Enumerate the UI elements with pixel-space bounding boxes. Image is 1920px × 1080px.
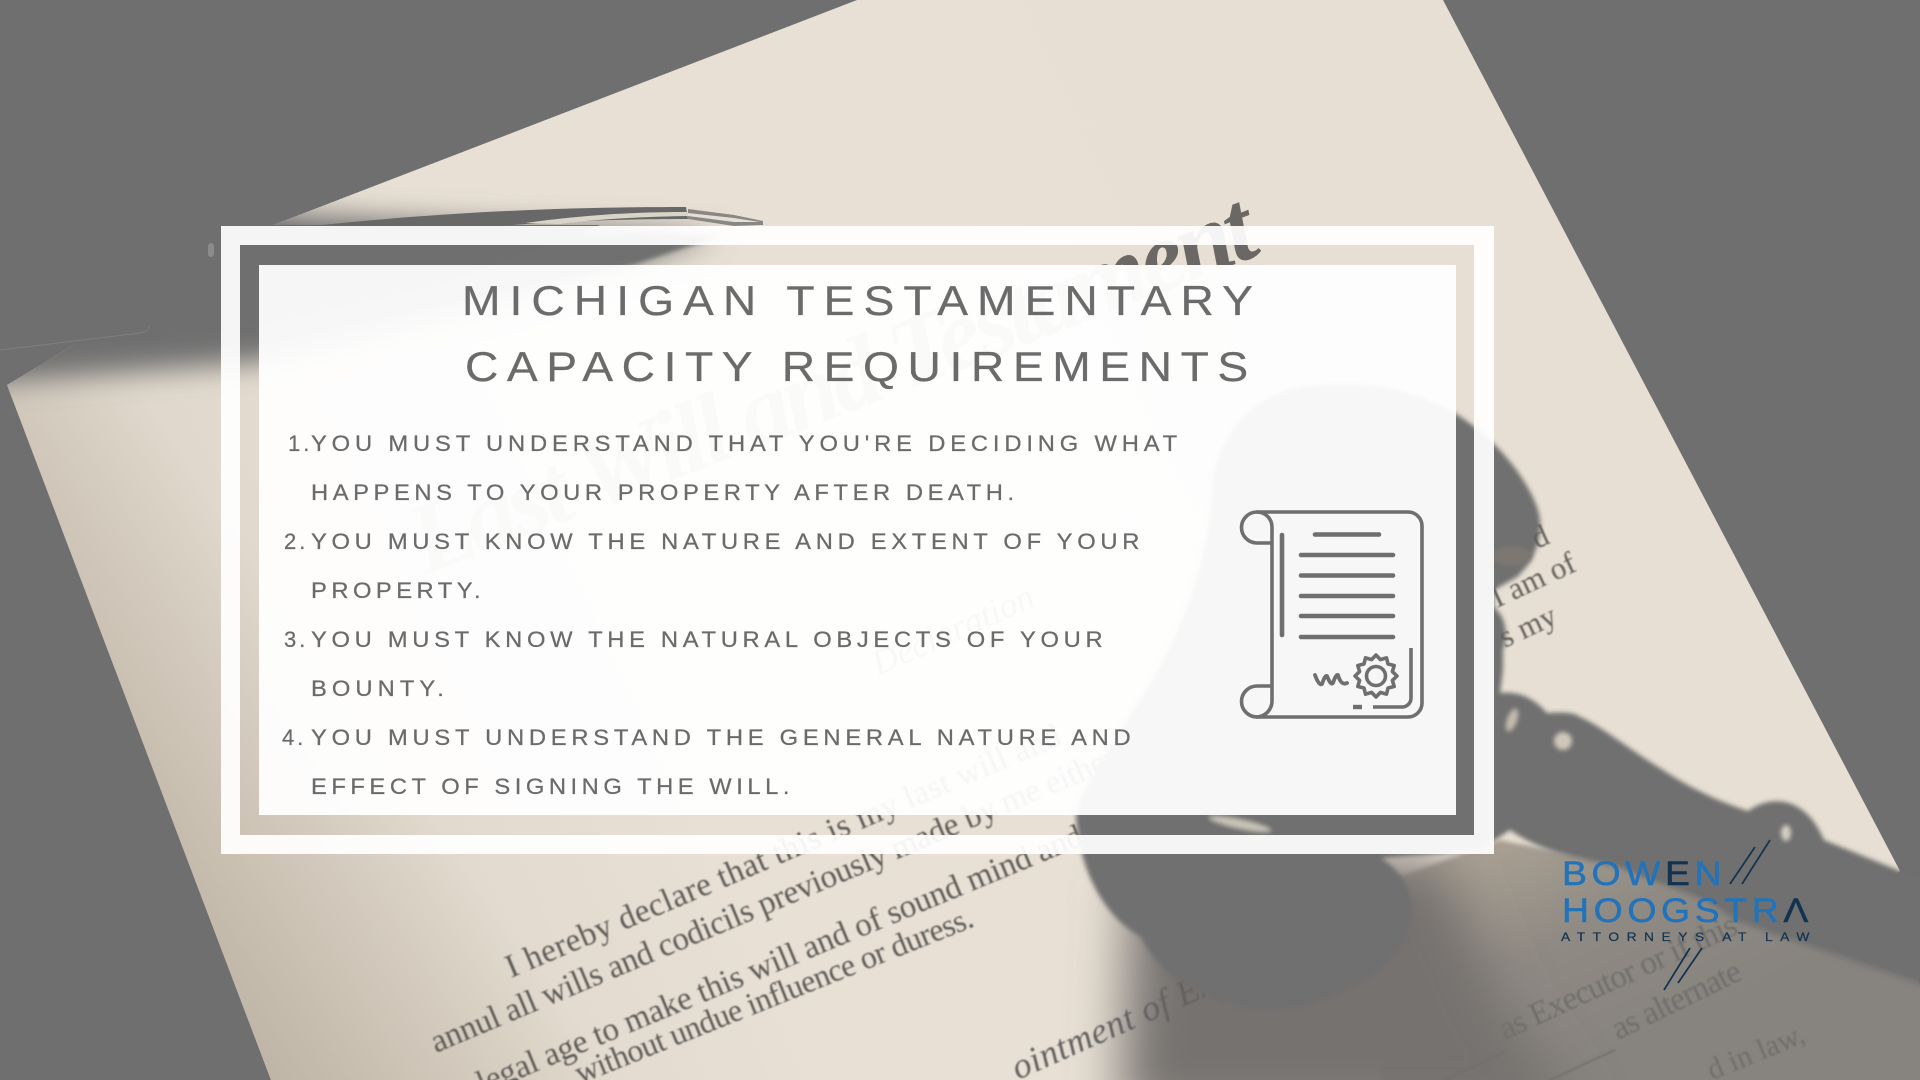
icon: scroll certificate <box>1242 512 1422 717</box>
photo: text beside gavel: d <box>1526 517 1554 555</box>
photo: faded text at lower right: as Executor or if this <box>1493 907 1743 1047</box>
item 3: BOUNTY. <box>311 676 444 701</box>
photo: declaration subheading: Declaration <box>864 576 1040 684</box>
item 4: EFFECT OF SIGNING THE WILL. <box>311 774 789 799</box>
logo: Bowen Hoogstra Attorneys at Law: BOWEN <box>1562 855 1722 893</box>
item 2 <box>284 529 1139 603</box>
title: MICHIGAN TESTAMENTARY <box>462 278 1253 325</box>
item 3: YOU MUST KNOW THE NATURAL OBJECTS OF YOUR <box>311 627 1103 652</box>
photo: pen <box>0 207 763 350</box>
photo: body text of the will: I hereby declare that this is my last will and <box>500 718 1067 985</box>
item 1: 1. <box>288 431 312 456</box>
item 4 <box>282 725 1131 799</box>
photo: text beside gavel: s my <box>1493 597 1562 654</box>
item 4: YOU MUST UNDERSTAND THE GENERAL NATURE AND <box>311 725 1131 750</box>
photo: faded text at lower right: as alternate <box>1606 953 1747 1047</box>
photo: pen shadow <box>7 198 716 400</box>
title <box>462 278 1253 391</box>
panel: requirements card <box>259 265 1456 815</box>
item 4: 4. <box>282 725 306 750</box>
item 3 <box>284 627 1103 701</box>
item 1: YOU MUST UNDERSTAND THAT YOU'RE DECIDING WHAT <box>311 431 1177 456</box>
item 1: HAPPENS TO YOUR PROPERTY AFTER DEATH. <box>311 480 1014 505</box>
item 3: 3. <box>284 627 308 652</box>
logo: Bowen Hoogstra Attorneys at Law <box>1561 840 1810 990</box>
item 2: YOU MUST KNOW THE NATURE AND EXTENT OF YOUR <box>311 529 1139 554</box>
photo: title letters above the card: Last Will and Testament <box>392 169 1273 596</box>
photo: gavel silhouette <box>1076 384 1920 1010</box>
item 1 <box>288 431 1177 505</box>
item 2: 2. <box>284 529 308 554</box>
item 2: PROPERTY. <box>311 578 481 603</box>
logo: Bowen Hoogstra Attorneys at Law: ATTORNEYS AT LAW <box>1561 930 1810 944</box>
requirements list <box>282 431 1177 799</box>
photo: faded text at lower right <box>1005 907 1809 1080</box>
photo: faint gothic will title: Last Will and Testament <box>392 169 1273 596</box>
photo: body text of the will: annul all wills and codicils previously made by me either <box>425 740 1121 1060</box>
photo: text beside gavel: I am of <box>1485 545 1582 614</box>
title: CAPACITY REQUIREMENTS <box>465 344 1248 391</box>
photo: text beside gavel <box>1485 517 1582 654</box>
logo: Bowen Hoogstra Attorneys at Law: HOOGSTRΛ <box>1562 892 1809 930</box>
photo: gavel highlights <box>1208 546 1791 841</box>
white frame <box>221 226 1494 854</box>
photo: soft shadow at lower right <box>1120 840 1920 1080</box>
